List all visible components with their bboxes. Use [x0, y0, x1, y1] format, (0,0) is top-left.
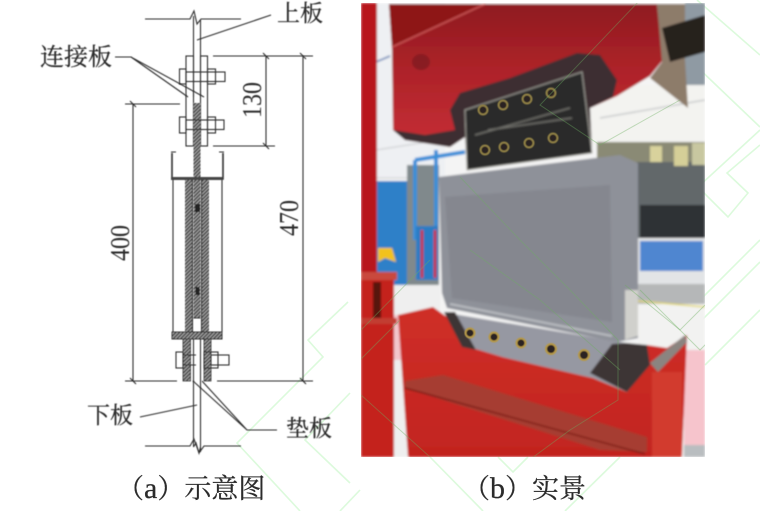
dimension 130: [213, 53, 313, 149]
windows and dark interior: [636, 160, 705, 240]
photo background: [374, 3, 684, 346]
lower welds: [444, 312, 650, 392]
label: 连接板: 连接板: [40, 44, 112, 71]
bolt inside lower: [196, 287, 200, 295]
flange end: [650, 335, 687, 372]
upper bolts: [180, 69, 225, 133]
label: 上板: 上板: [277, 1, 323, 26]
lower bolts on plate: [466, 328, 589, 360]
gray box: [439, 155, 638, 342]
label: 下板: 下板: [87, 403, 133, 428]
connecting plates: [186, 56, 194, 146]
dimension 470: [217, 53, 313, 384]
dimension 400: [105, 101, 180, 384]
left red column: [361, 3, 377, 275]
inner hatched plates: [185, 180, 192, 332]
bottom break line: [145, 439, 241, 453]
box top U channel: [172, 153, 223, 179]
floor right: [638, 284, 705, 457]
upper bolts on plate: [478, 88, 558, 154]
label 130: 130: [237, 82, 267, 118]
tube walls: [173, 180, 222, 332]
caption (a): （a）示意图: [117, 472, 265, 505]
floor left: [380, 285, 440, 457]
blue panel left: [375, 181, 407, 285]
lower red beam: [398, 307, 687, 457]
label 400: 400: [105, 225, 135, 261]
label: 上板: [197, 1, 323, 40]
weld band: [393, 52, 618, 151]
upper plate: [194, 16, 200, 97]
panel: schematic drawing: [145, 11, 241, 453]
caption (b): （b）实景: [463, 472, 586, 505]
blue panel right: [638, 238, 705, 284]
label: 垫板: 垫板: [286, 416, 332, 441]
top right gusset: [650, 4, 688, 108]
top red beam: [389, 4, 663, 147]
label 470: 470: [274, 200, 304, 236]
building wall right: [590, 85, 705, 145]
label: 垫板: [193, 381, 332, 441]
connecting plate right: [200, 56, 208, 146]
lower plate: [194, 339, 200, 453]
hatched central plate: [194, 103, 200, 318]
watermark lines: [237, 0, 760, 511]
left background wall: [375, 3, 445, 178]
label: 连接板: [40, 44, 204, 97]
photo: real view: [361, 3, 705, 457]
lower gray connection plate: [447, 313, 627, 392]
label: 下板: [87, 403, 197, 428]
lower hatched spacers: [183, 339, 190, 381]
yellow chair: [378, 248, 396, 262]
bottom end plate: [172, 332, 222, 339]
bolts inside: [195, 204, 200, 212]
lower bolt: [176, 352, 229, 368]
top break line: [145, 11, 241, 24]
watermark on photo: [361, 3, 705, 457]
lower hatched spacer right: [204, 339, 211, 381]
connection plate: [465, 72, 592, 170]
dark clamp: [662, 15, 705, 62]
inner hatched plate right: [202, 180, 209, 332]
